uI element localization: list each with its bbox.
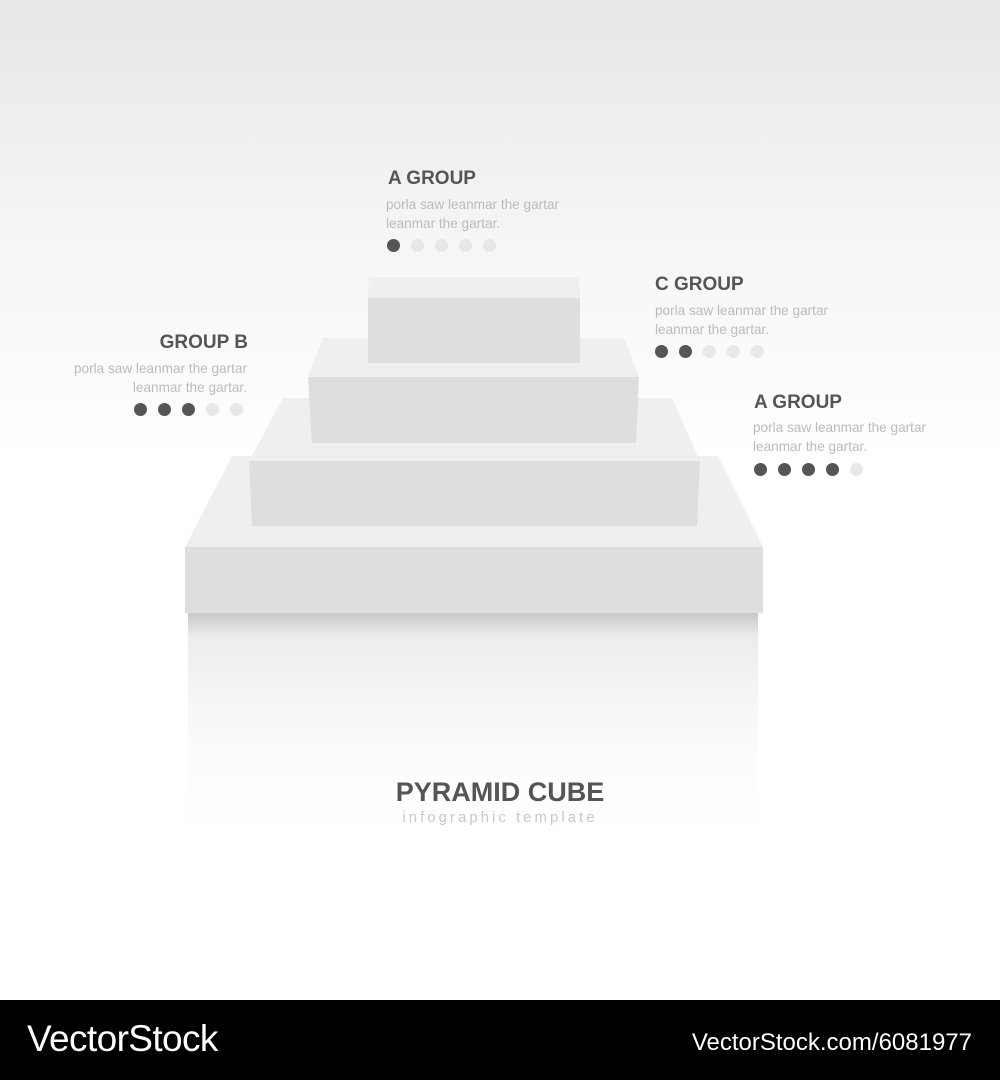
- tier 2: [308, 338, 639, 443]
- label: A GROUP right: [753, 392, 926, 476]
- tier 4: [185, 456, 763, 613]
- label: C GROUP: C GROUP: [655, 274, 744, 295]
- footer: [0, 1000, 1000, 1080]
- label: GROUP B: GROUP B: [160, 332, 248, 353]
- label: A GROUP right: porla saw leanmar the gartar: [753, 420, 926, 435]
- label: A GROUP top: A GROUP: [388, 168, 476, 189]
- label: A GROUP top: leanmar the gartar.: [386, 216, 500, 231]
- footer: VectorStock: [27, 1018, 218, 1059]
- label: A GROUP right: A GROUP: [754, 392, 842, 413]
- tier 1: [368, 277, 580, 363]
- label: GROUP B: [74, 332, 248, 416]
- title: PYRAMID CUBE: [396, 777, 604, 807]
- label: A GROUP right: leanmar the gartar.: [753, 439, 867, 454]
- tier 3: [249, 398, 700, 526]
- title: [396, 777, 604, 826]
- footer: VectorStock.com/6081977: [692, 1029, 972, 1056]
- label: C GROUP: [655, 274, 828, 358]
- shadow: [188, 612, 758, 857]
- label: C GROUP: leanmar the gartar.: [655, 322, 769, 337]
- title: infographic template: [402, 809, 598, 826]
- label: GROUP B: leanmar the gartar.: [133, 380, 247, 395]
- label: C GROUP: porla saw leanmar the gartar: [655, 303, 828, 318]
- label: GROUP B: porla saw leanmar the gartar: [74, 361, 247, 376]
- label: A GROUP top: porla saw leanmar the gartar: [386, 197, 559, 212]
- label: A GROUP top: [386, 168, 559, 252]
